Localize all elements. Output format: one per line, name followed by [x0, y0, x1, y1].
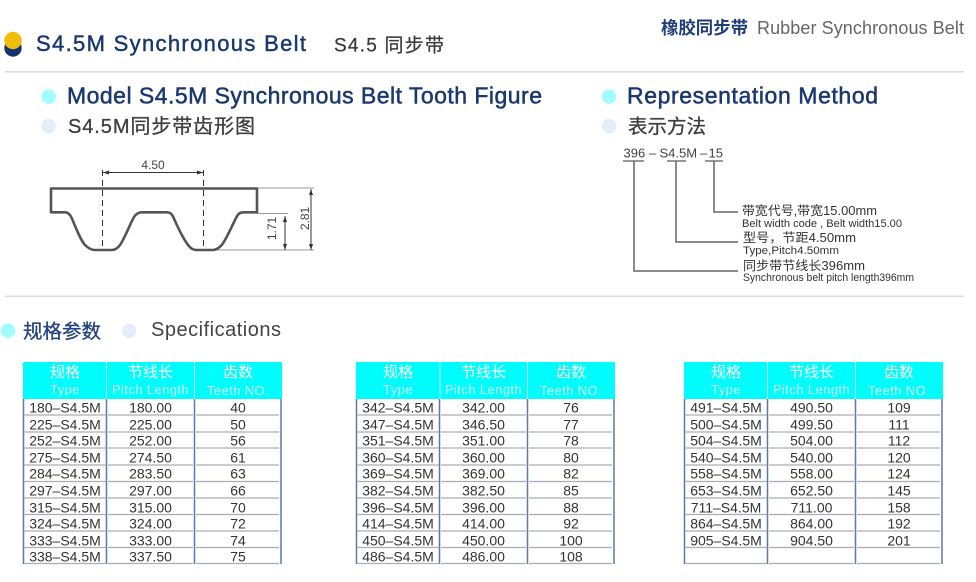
heading: specifications [1, 319, 281, 343]
panel: tooth figure heading [42, 82, 542, 138]
table header [356, 362, 615, 399]
table rows: 324.00 [129, 516, 172, 532]
table rows: 275–S4.5M [29, 450, 101, 466]
table rows: 414.00 [462, 516, 505, 532]
heading: specifications: 规格参数 [23, 321, 101, 343]
subtitle: S4.5 belt in Chinese: S4.5 同步带 [334, 34, 444, 56]
chart: representation method diagram: 15 [708, 146, 723, 160]
table rows: 85 [563, 482, 579, 498]
table rows: 369.00 [462, 466, 505, 482]
table rows: 120 [887, 450, 911, 466]
table header: 规格 [383, 364, 413, 381]
table rows: 360.00 [462, 450, 505, 466]
title: S4.5M Synchronous Belt: S4.5M Synchronous Belt [36, 31, 306, 56]
table rows: 109 [887, 400, 911, 416]
table rows: 486–S4.5M [362, 548, 434, 564]
table rows: 180–S4.5M [29, 400, 101, 416]
table rows: 66 [230, 482, 246, 498]
table header: 节线长 [461, 364, 506, 381]
table rows: 297–S4.5M [29, 482, 101, 498]
table header: 齿数 [556, 364, 586, 381]
table rows: 351–S4.5M [362, 432, 434, 448]
table rows: 92 [563, 516, 579, 532]
table rows: 351.00 [462, 432, 505, 448]
table rows: 315.00 [129, 500, 172, 516]
chart: belt tooth figure: 2.81 [298, 206, 312, 230]
chart: representation method diagram: – [649, 146, 657, 160]
table rows: 486.00 [462, 548, 505, 564]
table rows: 414–S4.5M [362, 516, 434, 532]
chart: representation method diagram: 同步带节线长396mm [743, 259, 865, 273]
chart: representation method diagram: S4.5M [660, 146, 697, 160]
chart: representation method diagram: Belt width code , Belt width15.00 [742, 218, 902, 230]
table header: 规格 [50, 364, 80, 381]
table header [684, 362, 943, 399]
table rows: 500–S4.5M [690, 416, 762, 432]
table rows: 50 [230, 416, 246, 432]
table rows: 711–S4.5M [691, 500, 761, 516]
table rows: 864.00 [790, 516, 833, 532]
chart: belt tooth figure: 4.50 [141, 158, 165, 172]
table rows: 72 [230, 516, 246, 532]
panel: representation method heading: Representation Method [627, 82, 878, 108]
table rows: 333–S4.5M [29, 532, 101, 548]
table rows: 297.00 [129, 482, 172, 498]
table rows: 82 [563, 466, 579, 482]
table rows: 40 [230, 400, 246, 416]
table rows: 342.00 [462, 400, 505, 416]
table rows: 80 [563, 450, 579, 466]
table rows: 504.00 [790, 432, 833, 448]
table rows: 124 [887, 466, 911, 482]
table rows: 346.50 [462, 416, 505, 432]
table rows: 491–S4.5M [690, 400, 762, 416]
table: specifications 2 [356, 362, 615, 564]
top right Chinese label: 橡胶同步带 [661, 18, 748, 38]
table rows: 324–S4.5M [29, 516, 101, 532]
table rows: 145 [887, 482, 911, 498]
table rows: 905–S4.5M [690, 532, 762, 548]
table rows: 490.50 [790, 400, 833, 416]
chart: representation method diagram: 型号，节距4.50mm [743, 231, 856, 245]
table header: 节线长 [128, 364, 173, 381]
chart: belt tooth figure [51, 158, 314, 250]
table rows: 63 [230, 466, 246, 482]
chart: representation method diagram: Synchronous belt pitch length396mm [743, 272, 914, 284]
table rows: 201 [887, 532, 911, 548]
table rows: 499.50 [790, 416, 833, 432]
table rows: 111 [888, 416, 910, 432]
table rows: 904.50 [790, 532, 833, 548]
table rows: 338–S4.5M [29, 548, 101, 564]
table header: Type [383, 382, 413, 397]
table rows: 540–S4.5M [690, 450, 762, 466]
table rows: 78 [563, 432, 579, 448]
table rows: 74 [230, 532, 246, 548]
table rows [362, 400, 583, 564]
table rows: 396.00 [462, 500, 505, 516]
table rows [690, 400, 911, 548]
table rows: 252.00 [129, 432, 172, 448]
table rows: 70 [230, 500, 246, 516]
chart: representation method diagram: Type,Pitch4.50mm [743, 245, 839, 257]
table rows: 76 [563, 400, 579, 416]
table rows: 382.50 [462, 482, 505, 498]
table rows: 56 [230, 432, 246, 448]
table rows: 347–S4.5M [362, 416, 434, 432]
table rows: 158 [887, 500, 911, 516]
table rows: 192 [887, 516, 911, 532]
panel: tooth figure heading: S4.5M同步带齿形图 [68, 115, 255, 138]
table header: 齿数 [223, 364, 253, 381]
chart: representation method diagram: 带宽代号,带宽15.00mm [742, 203, 877, 218]
table rows: 284–S4.5M [29, 466, 101, 482]
table rows: 711.00 [791, 500, 833, 516]
table header: Type [50, 382, 80, 397]
table header: Pitch Length [112, 382, 189, 397]
top right English label: Rubber Synchronous Belt [757, 18, 964, 38]
table rows: 558.00 [790, 466, 833, 482]
table rows [29, 400, 246, 564]
table rows: 342–S4.5M [362, 400, 434, 416]
table header: Teeth NO. [207, 383, 269, 398]
table rows: 112 [888, 432, 910, 448]
table header: 规格 [711, 364, 741, 381]
chart: representation method diagram: – [700, 146, 708, 160]
chart: representation method diagram [623, 146, 914, 284]
table rows: 450.00 [462, 532, 505, 548]
table rows: 225–S4.5M [29, 416, 101, 432]
table: specifications 3 [684, 362, 943, 564]
table: specifications 1 [23, 362, 282, 564]
table rows: 396–S4.5M [362, 500, 434, 516]
table rows: 337.50 [129, 548, 172, 564]
table rows: 333.00 [129, 532, 172, 548]
table rows: 61 [230, 450, 246, 466]
table header: Teeth NO. [868, 383, 930, 398]
table rows: 88 [563, 500, 579, 516]
table header: Type [711, 382, 741, 397]
table header: Teeth NO. [540, 383, 602, 398]
table header: Pitch Length [773, 382, 850, 397]
chart: belt tooth figure: 1.71 [265, 216, 279, 240]
table rows: 274.50 [129, 450, 172, 466]
table rows: 504–S4.5M [690, 432, 762, 448]
table rows: 558–S4.5M [690, 466, 762, 482]
table rows: 360–S4.5M [362, 450, 434, 466]
table header: 节线长 [789, 364, 834, 381]
table rows: 653–S4.5M [690, 482, 762, 498]
heading: specifications: Specifications [151, 319, 281, 341]
table rows: 283.50 [129, 466, 172, 482]
chart: representation method diagram: 396 [624, 146, 645, 160]
table rows: 540.00 [790, 450, 833, 466]
table header [23, 362, 282, 399]
table rows: 75 [230, 548, 246, 564]
icon: title bullet [4, 32, 22, 57]
table rows: 315–S4.5M [29, 500, 101, 516]
table rows: 450–S4.5M [362, 532, 434, 548]
table rows: 100 [559, 532, 583, 548]
panel: representation method heading: 表示方法 [628, 116, 706, 138]
table rows: 108 [559, 548, 583, 564]
table rows: 369–S4.5M [362, 466, 434, 482]
table rows: 77 [563, 416, 579, 432]
panel: tooth figure heading: Model S4.5M Synchronous Belt Tooth Figure [67, 82, 542, 108]
table rows: 252–S4.5M [29, 432, 101, 448]
table header: 齿数 [884, 364, 914, 381]
table rows: 382–S4.5M [362, 482, 434, 498]
table rows: 864–S4.5M [690, 516, 762, 532]
table rows: 225.00 [129, 416, 172, 432]
table rows: 652.50 [790, 482, 833, 498]
table header: Pitch Length [445, 382, 522, 397]
table rows: 180.00 [129, 400, 172, 416]
panel: representation method heading [602, 82, 878, 138]
